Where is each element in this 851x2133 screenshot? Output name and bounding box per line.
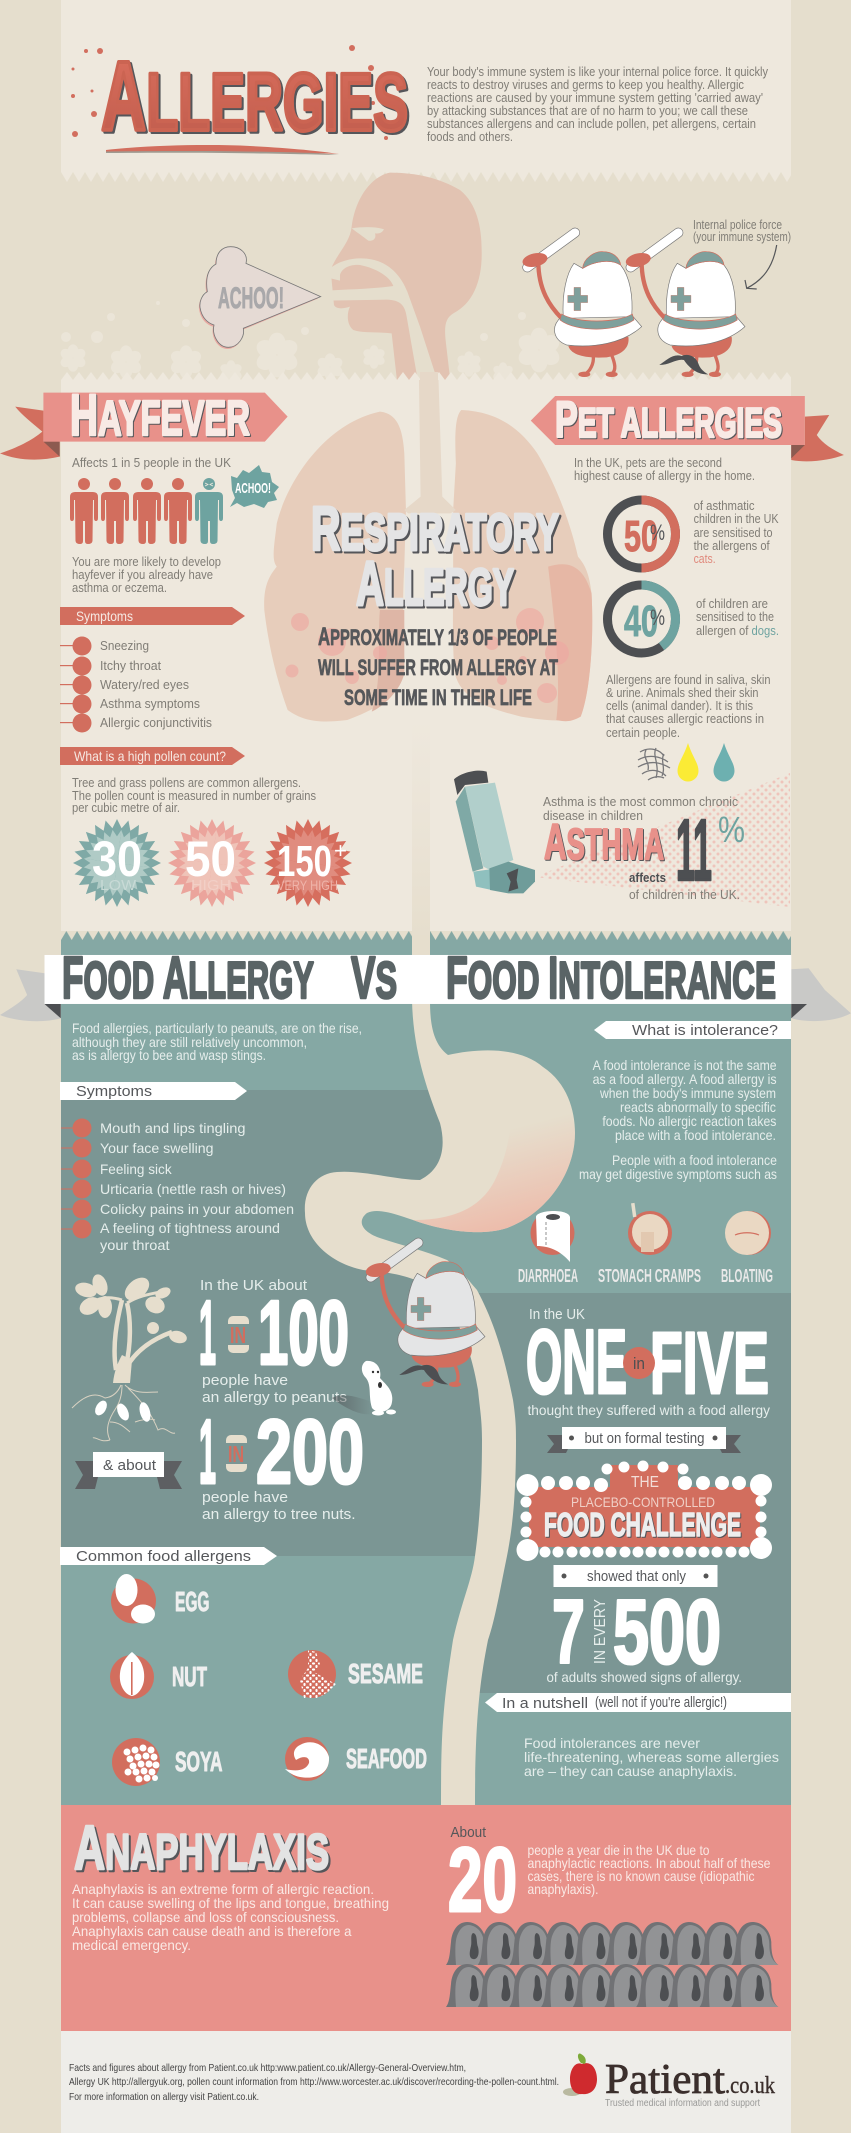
anaphylaxis description: problems, collapse and loss of consciousness. xyxy=(72,1909,339,1925)
intolerance text: reacts abnormally to specific xyxy=(620,1099,776,1115)
cats text xyxy=(694,498,779,566)
allergen: soya: SOYA xyxy=(175,1746,222,1777)
pollen text: Tree and grass pollens are common allergens. xyxy=(72,775,301,790)
cats text: are sensitised to xyxy=(694,525,773,540)
anaphylaxis description xyxy=(72,1881,389,1953)
allergens text: & urine. Animals shed their skin xyxy=(606,685,758,700)
allergen: seafood xyxy=(285,1737,427,1781)
icon: yellow drop xyxy=(678,743,698,782)
panel: intro header xyxy=(61,0,791,182)
dogs text: allergen of dogs. xyxy=(696,623,779,638)
allergen: egg: EGG xyxy=(175,1586,210,1617)
placebo food challenge marquee: THE xyxy=(631,1474,659,1491)
panel: anaphylaxis xyxy=(61,1805,791,2031)
respiratory statistic: WILL SUFFER FROM ALLERGY AT xyxy=(318,655,558,680)
asthma statistic: of children in the UK. xyxy=(629,887,740,902)
peanut statistic 1 in 200: people have xyxy=(202,1489,288,1506)
common food allergens label xyxy=(60,1547,277,1565)
anaphylaxis description: Anaphylaxis is an extreme form of allergic reaction. xyxy=(72,1881,374,1897)
food symptoms list: your throat xyxy=(100,1237,170,1253)
twenty deaths statistic: anaphylactic reactions. In about half of these xyxy=(528,1855,771,1871)
and about ribbon: & about xyxy=(103,1457,157,1474)
seven in every five hundred statistic: of adults showed signs of allergy. xyxy=(546,1669,742,1685)
asthma statistic: affects xyxy=(629,870,666,885)
asthma statistic: Asthma is the most common chronic xyxy=(543,794,738,809)
respiratory allergy heading: RESPIRATORY xyxy=(311,495,559,564)
peanut statistic 1 in 100: people have xyxy=(202,1372,288,1389)
peanut statistic 1 in 100: an allergy to peanuts xyxy=(202,1389,347,1406)
pollen count label: What is a high pollen count? xyxy=(74,748,226,764)
twenty deaths statistic: About xyxy=(450,1824,487,1841)
intro text: Your body's immune system is like your internal police force. It quickly xyxy=(427,64,768,79)
icon: diarrhoea toilet roll xyxy=(518,1211,578,1286)
intro text: by attacking substances that are of no harm to you; we call these xyxy=(427,103,748,118)
allergen: egg xyxy=(111,1574,210,1624)
dogs text: of children are xyxy=(696,596,768,611)
food symptoms list: Feeling sick xyxy=(100,1161,173,1177)
police force characters xyxy=(521,217,791,377)
respiratory allergy heading: ALLERGY xyxy=(356,549,514,619)
food allergy intro xyxy=(72,1020,362,1063)
achoo burst xyxy=(230,465,279,508)
police character one xyxy=(521,233,642,377)
symptoms list: Watery/red eyes xyxy=(100,677,189,692)
peanut statistic 1 in 100: IN xyxy=(230,1322,246,1348)
and about ribbon xyxy=(75,1452,182,1489)
hayfever risk text: You are more likely to develop xyxy=(72,554,221,569)
donut chart 40 percent xyxy=(608,585,676,653)
symptoms list: Itchy throat xyxy=(100,658,161,673)
asthma statistic: 11 xyxy=(676,802,712,899)
symptoms list: Sneezing xyxy=(100,638,149,653)
icon: stomach cramps xyxy=(598,1203,701,1286)
icon: pet hair xyxy=(638,748,670,780)
food symptoms list: Your face swelling xyxy=(100,1140,214,1156)
asthma statistic: ASTHMA xyxy=(544,814,664,870)
anaphylaxis description: Anaphylaxis can cause death and is therefore a xyxy=(72,1923,352,1939)
stomach illustration xyxy=(305,935,575,1805)
anaphylaxis description: It can cause swelling of the lips and tongue, breathing xyxy=(72,1895,389,1911)
food allergy intro: Food allergies, particularly to peanuts, are on the rise, xyxy=(72,1020,362,1036)
intolerance text: when the body's immune system xyxy=(599,1085,776,1101)
placebo food challenge marquee xyxy=(516,1460,772,1561)
allergens text xyxy=(606,672,770,740)
what is intolerance label xyxy=(594,1021,791,1039)
symptoms list: Asthma symptoms xyxy=(100,696,200,711)
head profile illustration xyxy=(327,173,482,383)
icon: peanut plant xyxy=(72,1272,188,1441)
police character on stomach xyxy=(365,1243,485,1387)
food symptoms list: Urticaria (nettle rash or hives) xyxy=(100,1181,286,1197)
nutshell text: are – they can cause anaphylaxis. xyxy=(524,1763,737,1779)
police caption: Internal police force xyxy=(693,217,782,232)
affects text: Affects 1 in 5 people in the UK xyxy=(72,455,231,470)
peanut statistic 1 in 200: 1 xyxy=(199,1402,216,1503)
peanut statistic 1 in 100 xyxy=(199,1277,349,1406)
in a nutshell label: In a nutshell xyxy=(502,1695,588,1712)
allergen: sesame xyxy=(288,1650,423,1698)
decorative splash dots xyxy=(71,45,388,140)
showed that only label: showed that only xyxy=(587,1568,686,1585)
title: ALLERGIES xyxy=(101,41,408,151)
pets intro text xyxy=(574,455,755,483)
respiratory allergy heading xyxy=(311,495,559,619)
nutshell text: Food intolerances are never xyxy=(524,1735,700,1751)
intro text: reacts to destroy viruses and germs to keep you healthy. Allergic xyxy=(427,77,744,92)
nutshell text xyxy=(524,1735,779,1779)
donut chart 40 percent: 40 xyxy=(624,597,658,646)
pets intro text: In the UK, pets are the second xyxy=(574,455,722,470)
intro text: substances allergens and can include pollen, pet allergens, certain xyxy=(427,116,756,131)
intolerance text: may get digestive symptoms such as xyxy=(579,1166,777,1182)
allergens text: cells (animal dander). It is this xyxy=(606,698,753,713)
twenty deaths statistic xyxy=(448,1824,771,1931)
intro text xyxy=(427,64,768,144)
anaphylaxis description: medical emergency. xyxy=(72,1937,191,1953)
donut chart 50 percent: 50 xyxy=(624,512,658,561)
sources text xyxy=(69,2062,559,2103)
patient logo text: Patient xyxy=(605,2057,725,2103)
pollen badge high xyxy=(168,819,256,907)
sources text: For more information on allergy visit Patient.co.uk. xyxy=(69,2091,259,2103)
symptoms label xyxy=(60,607,245,625)
icon: apple logo xyxy=(563,2054,597,2096)
icon: bloating xyxy=(721,1211,773,1286)
symptoms list: Allergic conjunctivitis xyxy=(100,715,212,730)
one in five statistic: In the UK xyxy=(529,1306,585,1323)
police caption: (your immune system) xyxy=(693,229,791,244)
showed that only label xyxy=(554,1565,718,1587)
food allergy banner: FOOD ALLERGY xyxy=(62,945,314,1011)
tombstones pictogram xyxy=(446,1922,778,2007)
peanut statistic 1 in 200: IN xyxy=(228,1441,244,1467)
nutshell text: life-threatening, whereas some allergies xyxy=(524,1749,779,1765)
police caption xyxy=(693,217,791,244)
one in five statistic: FIVE xyxy=(650,1315,769,1412)
hayfever risk text xyxy=(72,554,221,595)
respiratory statistic xyxy=(318,623,558,710)
food allergy banner: VS xyxy=(351,945,397,1011)
twenty deaths statistic: cases, there is no known cause (idiopathic xyxy=(528,1868,754,1884)
in a nutshell label: (well not if you're allergic!) xyxy=(595,1694,727,1711)
food symptoms list xyxy=(61,1118,294,1253)
common food allergens label: Common food allergens xyxy=(76,1548,251,1565)
seven in every five hundred statistic xyxy=(546,1582,742,1685)
peanut statistic 1 in 200 xyxy=(199,1402,364,1523)
patient logo text: Trusted medical information and support xyxy=(605,2098,760,2109)
seven in every five hundred statistic: 500 xyxy=(613,1582,721,1683)
pollen badge low: LOW xyxy=(100,877,137,894)
respiratory statistic: SOME TIME IN THEIR LIFE xyxy=(344,685,532,710)
panel: footer xyxy=(61,2031,791,2133)
pollen badge very high: + xyxy=(334,838,347,863)
peanut statistic 1 in 100: 100 xyxy=(258,1283,349,1384)
food symptoms list: Mouth and lips tingling xyxy=(100,1120,246,1136)
intolerance text: People with a food intolerance xyxy=(612,1152,777,1168)
pollen text: The pollen count is measured in number of grains xyxy=(72,788,316,803)
police character two xyxy=(625,233,745,377)
pollen badge high: 50 xyxy=(185,831,236,887)
pollen text: per cubic metre of air. xyxy=(72,800,180,815)
patient logo text xyxy=(605,2057,775,2109)
one in five statistic: thought they suffered with a food allergy xyxy=(528,1402,770,1418)
respiratory statistic: APPROXIMATELY 1/3 OF PEOPLE xyxy=(318,623,557,651)
asthma spray xyxy=(535,773,790,907)
cats text: children in the UK xyxy=(694,511,779,526)
pollen badge low: 30 xyxy=(92,831,142,887)
allergens text: certain people. xyxy=(606,725,680,740)
asthma statistic: % xyxy=(718,809,745,850)
peanut statistic 1 in 200: an allergy to tree nuts. xyxy=(202,1506,356,1523)
anaphylaxis heading: ANAPHYLAXIS xyxy=(74,1814,329,1883)
allergen: nut: NUT xyxy=(172,1661,207,1692)
dogs text: sensitised to the xyxy=(696,609,774,624)
icon: stomach cramps: STOMACH CRAMPS xyxy=(598,1266,701,1286)
cats text: cats. xyxy=(694,551,716,566)
twenty deaths statistic: anaphylaxis). xyxy=(528,1881,598,1897)
allergens text: that causes allergic reactions in xyxy=(606,711,764,726)
intolerance text: foods. No allergic reaction takes xyxy=(602,1113,776,1129)
food symptoms list: A feeling of tightness around xyxy=(100,1220,280,1236)
hayfever risk text: asthma or eczema. xyxy=(72,580,167,595)
pollen flowers xyxy=(59,301,563,384)
donut chart 50 percent xyxy=(608,500,676,568)
symptoms white label xyxy=(60,1082,247,1100)
one in five statistic: ONE xyxy=(526,1312,627,1413)
asthma statistic: disease in children xyxy=(543,808,643,823)
cats text: of asthmatic xyxy=(694,498,755,513)
pollen badge low xyxy=(73,819,161,907)
formal testing ribbon: but on formal testing xyxy=(584,1430,704,1447)
hayfever banner xyxy=(0,383,288,460)
arrow xyxy=(745,245,777,289)
peanut statistic 1 in 100: 1 xyxy=(199,1283,216,1384)
icon: teal drop xyxy=(714,743,734,782)
hayfever banner: HAYFEVER xyxy=(70,383,250,448)
allergen: nut xyxy=(110,1652,207,1699)
peanut character xyxy=(332,1361,396,1416)
twenty deaths statistic: 20 xyxy=(448,1830,517,1931)
panel: pet allergies xyxy=(531,391,844,782)
intolerance text: A food intolerance is not the same xyxy=(593,1057,777,1073)
dogs text xyxy=(696,596,779,638)
peanut statistic 1 in 100: In the UK about xyxy=(200,1277,308,1294)
patient logo text: .co.uk xyxy=(725,2073,775,2099)
title swoosh xyxy=(106,145,339,155)
cats text: the allergens of xyxy=(694,538,770,553)
allergen: soya xyxy=(112,1738,222,1786)
hayfever risk text: hayfever if you already have xyxy=(72,567,213,582)
people pictogram xyxy=(70,478,223,544)
what is intolerance label: What is intolerance? xyxy=(632,1022,778,1039)
donut chart 50 percent: % xyxy=(650,520,665,545)
asthma statistic xyxy=(543,794,745,902)
allergens text: Allergens are found in saliva, skin xyxy=(606,672,770,687)
twenty deaths statistic: people a year die in the UK due to xyxy=(528,1842,710,1858)
pollen badge very high: VERY HIGH xyxy=(277,877,338,893)
pollen text xyxy=(72,775,316,815)
intro text: reactions are caused by your immune system getting 'carried away' xyxy=(427,90,763,105)
symptoms white label: Symptoms xyxy=(76,1083,152,1100)
pollen badge high: HIGH xyxy=(191,877,231,894)
donut chart 40 percent: % xyxy=(650,605,665,630)
achoo text: ACHOO! xyxy=(218,282,284,315)
pets intro text: highest cause of allergy in the home. xyxy=(574,468,755,483)
sources text: Allergy UK http://allergyuk.org, pollen count information from http://www.worcester.ac.uk/discover/recording-the-pollen-count.html. xyxy=(69,2076,559,2088)
seven in every five hundred statistic: 7 xyxy=(552,1582,585,1683)
intolerance text: place with a food intolerance. xyxy=(615,1127,776,1143)
peanut statistic 1 in 200: 200 xyxy=(256,1402,364,1503)
one in five statistic: in xyxy=(633,1354,645,1373)
food allergy intro: although they are still relatively uncommon, xyxy=(72,1034,307,1050)
placebo food challenge marquee: PLACEBO-CONTROLLED xyxy=(571,1494,715,1510)
lungs illustration xyxy=(264,380,592,721)
panel: food allergy section backgrounds xyxy=(61,720,791,1805)
intro text: foods and others. xyxy=(427,129,513,144)
intolerance text xyxy=(579,1057,777,1182)
formal testing ribbon xyxy=(547,1427,741,1453)
sources text: Facts and figures about allergy from Patient.co.uk http:www.patient.co.uk/Allergy-General-Overview.htm, xyxy=(69,2062,466,2074)
icon: diarrhoea toilet roll: DIARRHOEA xyxy=(518,1266,578,1286)
in a nutshell label xyxy=(485,1693,791,1712)
achoo burst: ACHOO! xyxy=(235,480,271,497)
icon: inhaler xyxy=(454,771,535,893)
panel: hayfever xyxy=(0,383,352,907)
pollen badge very high xyxy=(264,819,352,907)
sneeze cloud xyxy=(199,247,321,349)
food symptoms list: Colicky pains in your abdomen xyxy=(100,1201,294,1217)
pollen badge very high: 150 xyxy=(277,837,332,886)
placebo food challenge marquee: FOOD CHALLENGE xyxy=(544,1506,741,1543)
seven in every five hundred statistic: IN EVERY xyxy=(592,1599,609,1664)
allergen: seafood: SEAFOOD xyxy=(346,1743,427,1774)
throat column xyxy=(420,372,438,422)
food allergy banner xyxy=(0,945,851,1021)
allergen: sesame: SESAME xyxy=(348,1658,423,1689)
symptoms label: Symptoms xyxy=(76,608,133,624)
panel: main light background xyxy=(61,372,791,931)
intolerance text: as a food allergy. A food allergy is xyxy=(593,1071,777,1087)
symptoms list xyxy=(60,636,212,732)
food allergy intro: as is allergy to bee and wasp stings. xyxy=(72,1047,266,1063)
icon: bloating: BLOATING xyxy=(721,1266,773,1286)
